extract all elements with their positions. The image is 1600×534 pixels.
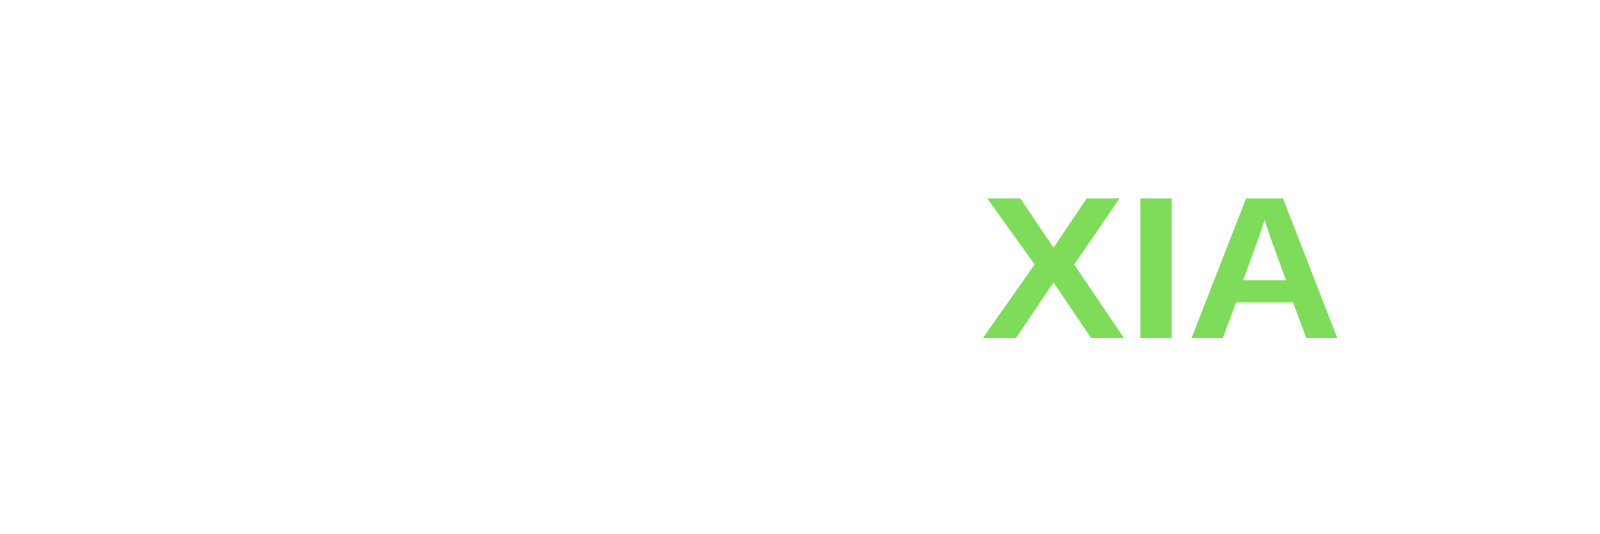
title: XIA: XIA	[981, 155, 1343, 382]
